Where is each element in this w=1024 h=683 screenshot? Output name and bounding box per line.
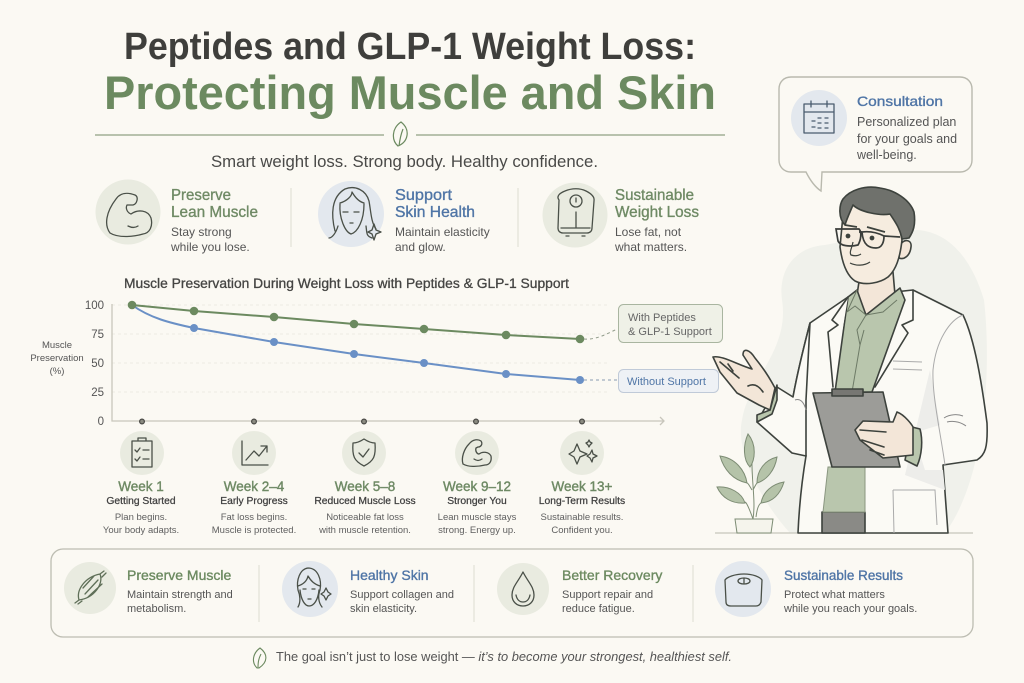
benefit: support skin health — [318, 181, 490, 254]
title divider with leaf — [95, 122, 725, 146]
neck — [857, 272, 895, 315]
y axis title: (%) — [50, 366, 64, 377]
timeline: week 5-8: Reduced Muscle Loss — [314, 496, 416, 507]
icon: water drop — [512, 572, 534, 606]
y axis labels: 0 — [98, 416, 104, 428]
timeline: week 2-4: Week 2–4 — [224, 479, 285, 494]
icon: leaf — [253, 648, 266, 668]
text: preserve lean muscle: Preserve — [171, 187, 231, 204]
benefit: sustainable weight loss — [542, 182, 699, 254]
timeline: week 2-4: Fat loss begins. — [221, 512, 287, 523]
timeline: week 1: Your body adapts. — [103, 525, 179, 536]
item: healthy skin: Support collagen and — [350, 589, 454, 601]
title — [104, 26, 716, 119]
trousers — [822, 512, 865, 533]
timeline: week 13+ — [539, 431, 625, 536]
lapels — [828, 290, 913, 387]
hair — [840, 187, 915, 239]
timeline: week 1: Week 1 — [118, 479, 164, 494]
chart title: Muscle Preservation During Weight Loss with Peptides & GLP-1 Support — [124, 276, 569, 291]
icon: growth chart — [242, 441, 268, 465]
timeline: week 9-12: strong. Energy up. — [438, 525, 516, 536]
item: healthy skin — [282, 561, 454, 617]
closing message: The goal isn’t just to lose weight — it’s to become your strongest, healthiest self. — [276, 649, 732, 664]
item: preserve muscle — [64, 562, 233, 615]
text: support skin health: Skin Health — [395, 204, 475, 221]
legend: with support: & GLP-1 Support — [628, 326, 712, 338]
coat — [793, 290, 987, 533]
timeline: week 9-12 — [438, 431, 517, 536]
text: consultation: well-being. — [856, 148, 917, 162]
item: sustainable results — [715, 561, 917, 617]
item: healthy skin: Healthy Skin — [350, 567, 429, 583]
text: support skin health: and glow. — [395, 240, 446, 254]
icon: face — [297, 568, 331, 607]
y axis title — [30, 340, 84, 377]
benefit: preserve lean muscle — [96, 180, 258, 254]
timeline: week 9-12: Stronger You — [447, 496, 507, 507]
timeline: week 13+: Long-Term Results — [539, 496, 625, 507]
text: sustainable weight loss — [614, 187, 699, 254]
text: support skin health: Support — [395, 187, 453, 204]
icon: calendar — [804, 101, 834, 133]
timeline: week 5-8 — [314, 431, 416, 536]
pointing arm — [757, 323, 810, 456]
icon: flexed arm — [462, 440, 491, 466]
face — [840, 205, 902, 284]
right hand — [855, 412, 913, 458]
icon: muscle fibre — [75, 571, 106, 604]
item: better recovery: reduce fatigue. — [562, 603, 635, 615]
lower shirt — [823, 467, 865, 512]
timeline: week 5-8: Noticeable fat loss — [326, 512, 404, 523]
text: sustainable weight loss: Weight Loss — [615, 204, 699, 221]
text: consultation: for your goals and — [857, 132, 957, 146]
shirt — [835, 288, 905, 392]
timeline: week 9-12: Lean muscle stays — [438, 512, 517, 523]
y axis labels: 100 — [85, 300, 104, 312]
timeline: week 1: Plan begins. — [115, 512, 167, 523]
item: better recovery — [497, 563, 662, 615]
item: healthy skin: skin elasticity. — [350, 603, 417, 615]
text: sustainable weight loss: what matters. — [614, 240, 687, 254]
speech bubble: consultation — [779, 77, 972, 191]
ground line — [715, 532, 973, 534]
icon: clipboard — [132, 438, 152, 467]
legend: without support: Without Support — [627, 376, 706, 388]
left cuff — [757, 385, 777, 422]
x axis ticks — [140, 419, 584, 424]
item: preserve muscle: Preserve Muscle — [127, 567, 231, 583]
text: preserve lean muscle: Lean Muscle — [171, 204, 258, 221]
line chart — [30, 300, 722, 428]
timeline: week 2-4: Early Progress — [220, 496, 288, 507]
timeline: week 2-4: Muscle is protected. — [212, 525, 296, 536]
icon: scale — [725, 574, 762, 606]
legend: without support — [618, 370, 718, 392]
sleeve creases — [795, 399, 966, 426]
item: better recovery: Better Recovery — [562, 567, 662, 583]
item: sustainable results: Sustainable Results — [784, 567, 903, 583]
legend: with support: With Peptides — [628, 312, 696, 324]
y axis labels: 50 — [91, 358, 104, 370]
timeline: week 1 — [103, 431, 179, 536]
background blob — [741, 230, 987, 533]
item: sustainable results: while you reach your goals. — [783, 603, 917, 615]
coat shading — [905, 370, 945, 490]
left hand — [713, 350, 775, 410]
icon: scale — [558, 189, 594, 236]
timeline: week 13+: Week 13+ — [552, 479, 613, 494]
timeline: week 2-4 — [212, 431, 296, 536]
text: support skin health — [395, 187, 490, 254]
y axis labels: 25 — [91, 387, 104, 399]
timeline: week 13+: Sustainable results. — [541, 512, 623, 523]
series: with support — [128, 301, 584, 343]
text: sustainable weight loss: Sustainable — [615, 187, 694, 204]
coat pocket details — [893, 315, 963, 533]
text: preserve lean muscle: while you lose. — [170, 240, 250, 254]
icon: sparkles — [569, 440, 597, 464]
item: sustainable results: Protect what matters — [784, 589, 885, 601]
plant — [717, 434, 784, 533]
text: consultation: Personalized plan — [857, 115, 956, 129]
text: consultation: Consultation — [857, 93, 943, 109]
icon: face — [329, 188, 381, 240]
text: sustainable weight loss: Lose fat, not — [615, 225, 682, 239]
title: Peptides and GLP-1 Weight Loss: — [124, 26, 696, 68]
y axis title: Preservation — [30, 353, 84, 364]
text: consultation — [856, 93, 957, 162]
glasses — [836, 229, 900, 248]
right cuff — [905, 427, 922, 466]
subtitle: Smart weight loss. Strong body. Healthy confidence. — [211, 153, 598, 171]
facial features — [845, 225, 885, 265]
item: preserve muscle: metabolism. — [127, 603, 186, 615]
legend: with support — [618, 304, 722, 342]
series: without support — [132, 305, 584, 384]
timeline: week 13+: Confident you. — [551, 525, 613, 536]
y axis title: Muscle — [42, 340, 72, 351]
doctor illustration — [713, 187, 987, 533]
ear — [899, 241, 911, 259]
timeline: week 9-12: Week 9–12 — [443, 479, 511, 494]
icon: shield — [353, 439, 375, 466]
text: support skin health: Maintain elasticity — [395, 225, 490, 239]
item: preserve muscle: Maintain strength and — [127, 589, 233, 601]
item: better recovery: Support repair and — [562, 589, 653, 601]
title: Protecting Muscle and Skin — [104, 66, 716, 119]
timeline: week 5-8: with muscle retention. — [318, 525, 411, 536]
bottom benefits panel — [51, 549, 973, 637]
icon: flexed arm — [107, 193, 152, 236]
clipboard — [813, 389, 900, 467]
y axis labels: 75 — [91, 329, 104, 341]
text: preserve lean muscle — [170, 187, 258, 254]
y axis labels — [85, 300, 104, 428]
text: preserve lean muscle: Stay strong — [171, 225, 232, 239]
timeline: week 5-8: Week 5–8 — [335, 479, 395, 494]
timeline: week 1: Getting Started — [106, 496, 176, 507]
